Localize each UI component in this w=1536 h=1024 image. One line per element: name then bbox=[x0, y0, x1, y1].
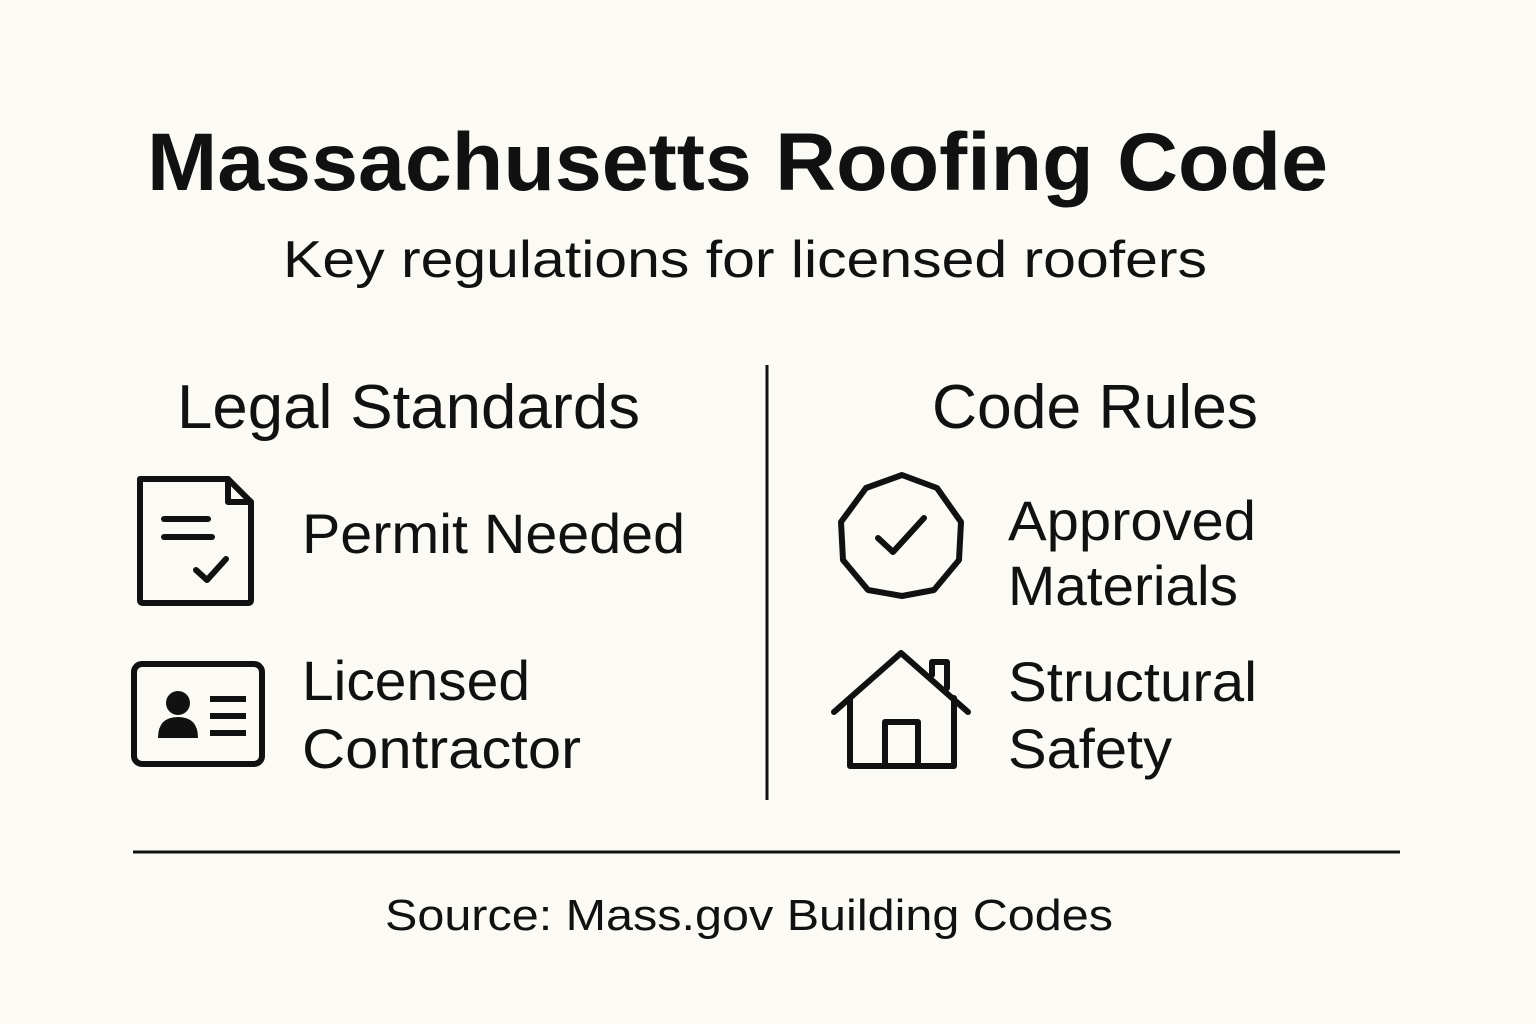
icon: house bbox=[834, 653, 968, 766]
text: Structural Safety: Safety bbox=[1008, 717, 1172, 780]
text: Approved Materials bbox=[1008, 489, 1256, 617]
title: Massachusetts Roofing Code bbox=[147, 117, 1328, 208]
icon: license card bbox=[134, 664, 262, 764]
heading: Legal Standards: Legal Standards bbox=[177, 373, 640, 442]
heading: Code Rules: Code Rules bbox=[932, 373, 1258, 442]
text: Approved Materials: Approved bbox=[1008, 489, 1256, 552]
text: Approved Materials: Materials bbox=[1008, 554, 1238, 617]
text: Structural Safety: Structural bbox=[1008, 650, 1257, 713]
text: Permit Needed: Permit Needed bbox=[302, 502, 685, 565]
text: Licensed Contractor: Contractor bbox=[302, 717, 581, 780]
source: Source: Mass.gov Building Codes bbox=[385, 891, 1113, 940]
text: Licensed Contractor bbox=[302, 649, 581, 780]
text: Structural Safety bbox=[1008, 650, 1257, 780]
icon: approved badge bbox=[841, 475, 961, 596]
icon: permit document bbox=[140, 479, 251, 603]
text: Licensed Contractor: Licensed bbox=[302, 649, 530, 712]
subtitle: Key regulations for licensed roofers bbox=[283, 231, 1207, 289]
